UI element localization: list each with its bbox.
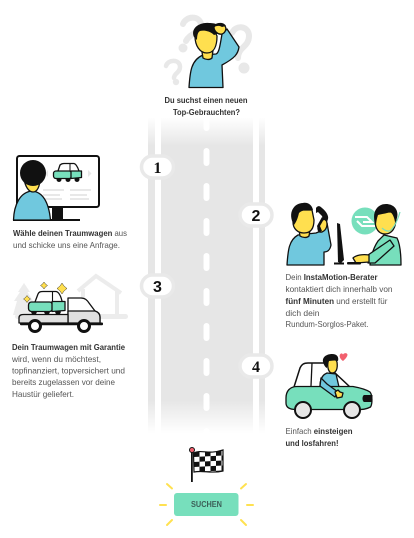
text: step 3: Haustür geliefert.	[12, 390, 74, 399]
step badge 4: 4	[252, 359, 260, 376]
heading: question	[164, 96, 248, 117]
text: step 2: dich dein	[286, 309, 320, 318]
text: step 3: wird, wenn du möchtest,	[11, 355, 101, 364]
step badge 3	[142, 275, 174, 297]
text: step 3: Dein Traumwagen mit Garantie	[12, 343, 125, 352]
text: step 3: topfinanziert, topversichert und	[12, 366, 125, 376]
icon: person at monitor choosing a car	[13, 156, 99, 221]
icon: happy driver in green car	[286, 353, 372, 418]
text: step 2: Rundum-Sorglos-Paket.	[286, 320, 368, 329]
text: step 1: und schicke uns eine Anfrage.	[13, 241, 120, 250]
text: step 2: fünf Minuten und erstellt für	[286, 297, 388, 306]
icon: truck delivering a car	[13, 276, 128, 332]
icon: checkered flag	[190, 448, 223, 482]
text: step 4: Einfach einsteigen	[286, 427, 353, 436]
text: step 1	[13, 229, 127, 250]
text: step 3	[11, 343, 125, 399]
step badge 2	[240, 204, 272, 226]
text: step 1: Wähle deinen Traumwagen aus	[13, 229, 127, 238]
text: step 2: Dein InstaMotion-Berater	[286, 273, 378, 282]
icon: confused person with question marks	[166, 18, 250, 88]
text: step 2	[286, 273, 392, 329]
icon: customer phoning InstaMotion adviser	[287, 203, 401, 265]
step badge 3: 3	[153, 279, 162, 296]
button: search: SUCHEN	[191, 500, 222, 509]
step badge 1: 1	[154, 160, 162, 177]
step badge 4	[240, 355, 272, 377]
icon: yellow rays around button	[160, 484, 253, 525]
heading: question: Top-Gebrauchten?	[173, 108, 240, 117]
text: step 4: und losfahren!	[286, 439, 338, 448]
step badge 2: 2	[252, 208, 261, 225]
heading: question: Du suchst einen neuen	[164, 96, 248, 105]
text: step 3: bereits zugelassen vor deine	[12, 378, 115, 387]
road	[145, 113, 269, 446]
text: step 2: kontaktiert dich innerhalb von	[286, 285, 392, 294]
button: search	[174, 493, 238, 516]
text: step 4	[286, 427, 353, 448]
step badge 1	[142, 156, 174, 178]
